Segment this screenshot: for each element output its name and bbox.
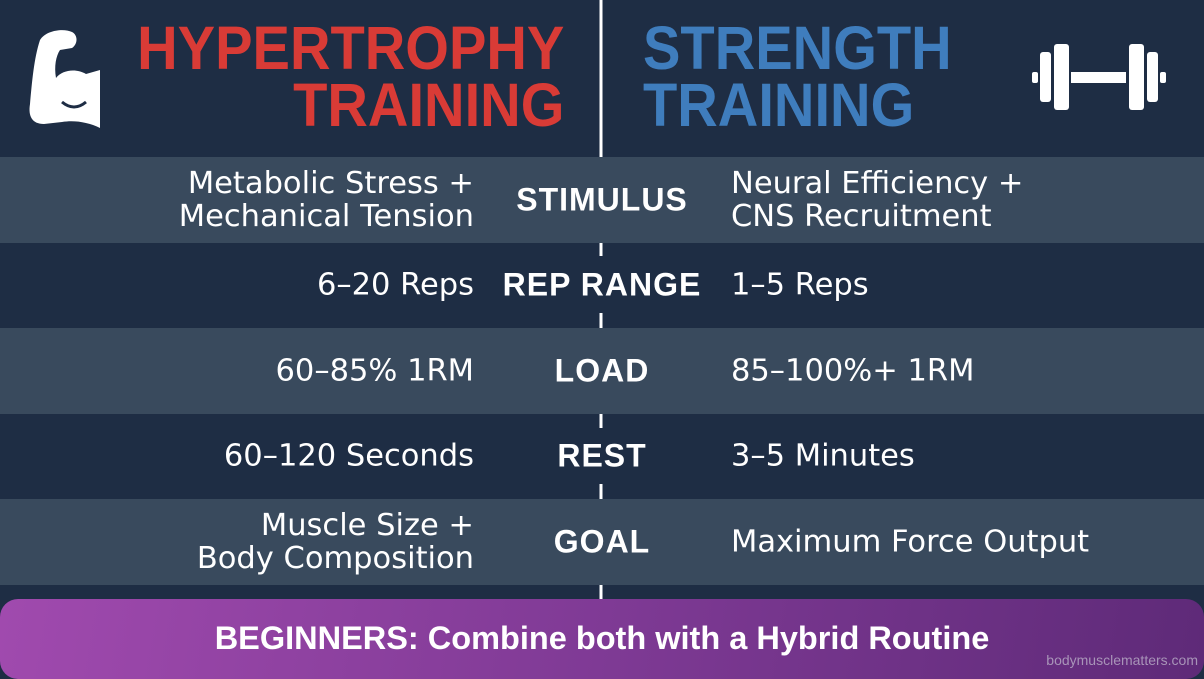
row: stimulus <box>0 157 1204 243</box>
row: stimulus: CNS Recruitment <box>731 199 992 234</box>
row: rest <box>224 438 915 474</box>
icon: flexed bicep <box>30 30 100 128</box>
row: stimulus: Neural Efficiency + <box>731 166 1023 201</box>
title: hypertrophy training <box>137 14 564 139</box>
row: rest: 3–5 Minutes <box>731 438 915 474</box>
banner: beginners <box>0 599 1204 679</box>
row: rep range: 6–20 Reps <box>317 268 474 302</box>
row: load: LOAD <box>555 352 649 388</box>
row: rest: 60–120 Seconds <box>224 438 474 474</box>
watermark: bodymusclematters.com <box>1046 652 1198 668</box>
row: rep range: 1–5 Reps <box>731 268 869 302</box>
row: load <box>0 328 1204 414</box>
title: strength training: STRENGTH <box>643 14 952 82</box>
title: strength training: TRAINING <box>643 71 914 139</box>
row: stimulus: Metabolic Stress + <box>188 166 474 201</box>
row: goal: Muscle Size + <box>261 508 474 543</box>
banner: beginners: BEGINNERS: Combine both with a Hybrid Routine <box>215 620 989 656</box>
row: rep range: REP RANGE <box>503 266 701 302</box>
row: load: 60–85% 1RM <box>276 354 474 388</box>
row: load: 85–100%+ 1RM <box>731 354 974 388</box>
row: goal <box>0 499 1204 585</box>
icon: dumbbell <box>1032 44 1166 110</box>
row: stimulus: STIMULUS <box>516 182 688 218</box>
title: strength training <box>643 14 952 139</box>
row: goal: Maximum Force Output <box>731 524 1089 560</box>
row: rest: REST <box>557 438 647 474</box>
title: hypertrophy training: TRAINING <box>293 71 564 139</box>
title: hypertrophy training: HYPERTROPHY <box>137 14 564 82</box>
row: goal: Body Composition <box>197 541 474 576</box>
row: rep range <box>317 266 869 302</box>
row: goal: GOAL <box>554 524 650 560</box>
row: stimulus: Mechanical Tension <box>179 199 474 234</box>
